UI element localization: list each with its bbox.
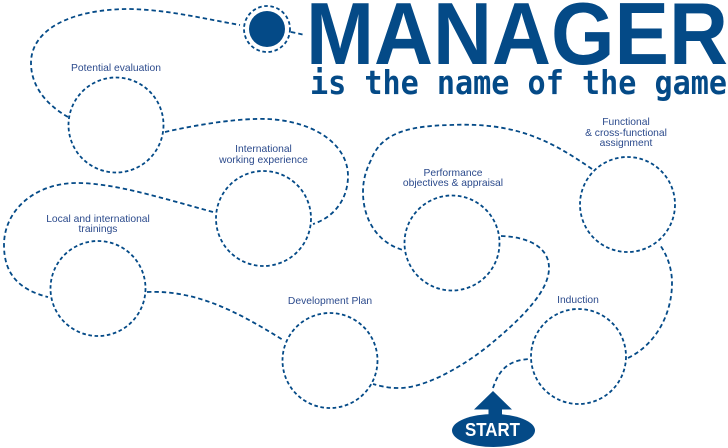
path: local to international xyxy=(4,183,213,297)
path: development to local xyxy=(147,292,283,340)
step: potential evaluation xyxy=(68,63,164,172)
icon: goal dot xyxy=(244,6,290,52)
start label: START xyxy=(465,420,520,440)
circle: international working experience xyxy=(216,171,311,266)
step: local and international trainings xyxy=(46,214,150,336)
label: international working experience: International xyxy=(235,144,292,155)
path: induction to functional xyxy=(628,245,672,358)
label: local and international trainings: trainings xyxy=(79,224,117,235)
label: potential evaluation: Potential evaluation xyxy=(71,63,161,74)
path: start to induction xyxy=(493,359,530,388)
label: induction: Induction xyxy=(557,295,599,306)
label: local and international trainings: Local and international xyxy=(46,214,150,225)
step: performance objectives and appraisal xyxy=(403,168,503,290)
label: performance objectives and appraisal: objectives & appraisal xyxy=(403,178,503,189)
arrow: start xyxy=(474,391,512,415)
circle: functional and cross-functional assignment xyxy=(580,157,675,252)
start marker xyxy=(452,391,535,447)
start ellipse xyxy=(452,414,535,447)
path: performance to development xyxy=(373,236,549,388)
label: functional and cross-functional assignment: assignment xyxy=(600,138,652,149)
label: development plan: Development Plan xyxy=(288,296,372,307)
label: functional and cross-functional assignment: Functional xyxy=(602,117,650,128)
path: goal exit xyxy=(291,32,305,35)
circle: local and international trainings xyxy=(50,241,146,336)
step: functional and cross-functional assignment xyxy=(580,117,675,252)
step: induction xyxy=(531,295,626,404)
path: functional to performance xyxy=(363,125,592,250)
circle: development plan xyxy=(282,313,378,408)
circle: potential evaluation xyxy=(68,78,164,172)
circle: performance objectives and appraisal xyxy=(404,196,500,290)
step: international working experience xyxy=(216,144,311,266)
path: potential to goal xyxy=(31,9,240,117)
circle: induction xyxy=(531,309,626,404)
label: international working experience: working experience xyxy=(218,155,308,166)
step: development plan xyxy=(282,296,378,408)
label: functional and cross-functional assignment: & cross-functional xyxy=(585,128,667,139)
path: international to potential xyxy=(165,119,348,224)
label: performance objectives and appraisal: Performance xyxy=(424,168,483,179)
